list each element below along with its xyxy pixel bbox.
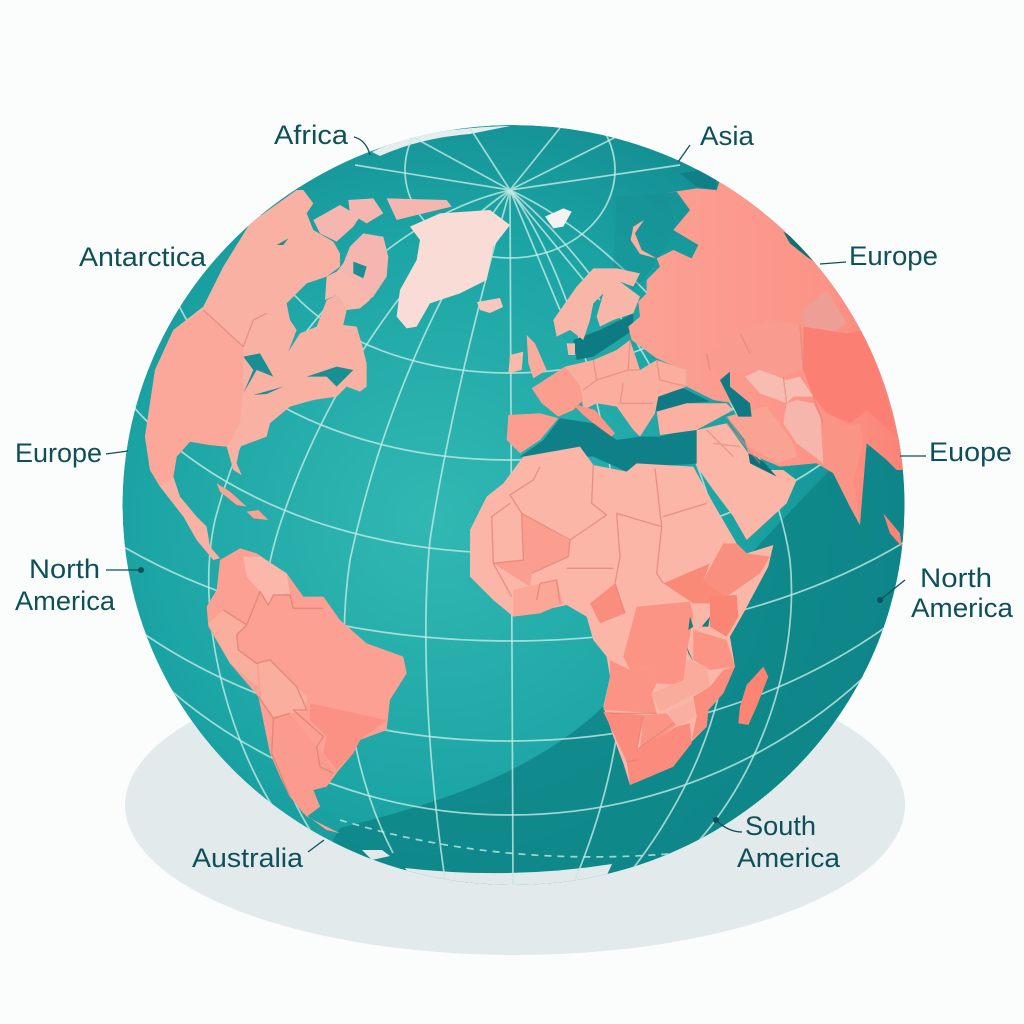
Scandinavia bbox=[553, 268, 640, 340]
continent: Africa bbox=[470, 447, 773, 785]
globe bbox=[122, 125, 904, 885]
label: North America right bbox=[877, 563, 1014, 623]
Labrador bridge bbox=[325, 270, 370, 310]
label: North America left: America bbox=[15, 586, 116, 616]
lake bbox=[687, 617, 710, 662]
Madagascar bbox=[738, 667, 768, 725]
Italy bbox=[572, 403, 615, 437]
label: Europe left: Europe bbox=[15, 438, 102, 468]
label: Antarctica: Antarctica bbox=[79, 242, 207, 272]
Turkey bbox=[657, 403, 733, 435]
border lines bbox=[203, 310, 267, 347]
Mediterranean, Baltic and Arctic dark seas bbox=[520, 167, 717, 473]
island: Iceland bbox=[477, 298, 503, 313]
Antarctic ice small fragment bbox=[362, 850, 390, 860]
ocean shaded crescent bbox=[332, 434, 904, 885]
label: South America: South bbox=[745, 811, 816, 841]
Mongolia bbox=[804, 290, 846, 332]
label: North America right: America bbox=[911, 593, 1014, 623]
Eurasia bbox=[506, 182, 903, 546]
label: North America left bbox=[15, 554, 144, 616]
Central Asia bbox=[745, 370, 813, 403]
label: Africa: Africa bbox=[274, 120, 349, 150]
label: North America left: North bbox=[29, 554, 100, 584]
Novaya Zemlya bbox=[631, 220, 657, 258]
Greenland bbox=[397, 210, 510, 328]
label: South America: America bbox=[737, 843, 841, 873]
Denmark bbox=[567, 343, 575, 355]
Cuba and Hispaniola bbox=[217, 483, 268, 520]
country borders bbox=[223, 592, 333, 797]
China bbox=[803, 326, 884, 424]
Iberia bbox=[507, 413, 558, 453]
label: Australia: Australia bbox=[192, 843, 304, 873]
Ireland bbox=[508, 352, 523, 373]
label: Asia: Asia bbox=[700, 121, 755, 151]
label: Europe right bbox=[900, 437, 1012, 467]
United Kingdom bbox=[527, 335, 547, 378]
ocean bbox=[122, 125, 904, 885]
continent: North America bbox=[145, 190, 510, 560]
European and Asian borders bbox=[583, 325, 823, 463]
label: North America right: North bbox=[920, 563, 992, 593]
polar ice top bbox=[372, 126, 510, 156]
Iran bbox=[727, 407, 797, 463]
Afghanistan and Pakistan bbox=[783, 400, 823, 463]
label: Europe right: Euope bbox=[929, 437, 1012, 467]
Svalbard bbox=[545, 208, 572, 228]
label: Europe upper right: Europe bbox=[849, 241, 938, 271]
polar ice bottom bbox=[405, 864, 612, 885]
western United States shading bbox=[145, 310, 243, 487]
country borders bbox=[492, 465, 707, 762]
country fills bbox=[493, 513, 570, 587]
Southeast Asia sliver bbox=[883, 513, 902, 547]
Sea of Okhotsk bbox=[783, 232, 814, 262]
Kazakhstan region bbox=[707, 320, 803, 377]
Arabian Peninsula bbox=[697, 423, 797, 540]
graticule bbox=[125, 128, 904, 885]
Russia and Asia base bbox=[628, 182, 903, 525]
Central Europe bbox=[565, 340, 687, 437]
India bbox=[820, 410, 863, 525]
continent: South America bbox=[207, 548, 407, 833]
label: South America bbox=[713, 811, 841, 873]
globe infographic bbox=[15, 124, 1013, 955]
Persian Gulf bbox=[748, 453, 777, 477]
Black Sea bbox=[655, 388, 710, 413]
France bbox=[532, 367, 583, 417]
Arctic islands bbox=[313, 198, 452, 307]
label: Africa bbox=[274, 120, 370, 155]
label: Asia bbox=[678, 121, 755, 162]
Caspian Sea bbox=[720, 372, 752, 417]
country fills bbox=[243, 557, 290, 605]
Great Lakes bbox=[243, 238, 367, 395]
ground shadow bbox=[125, 655, 905, 955]
